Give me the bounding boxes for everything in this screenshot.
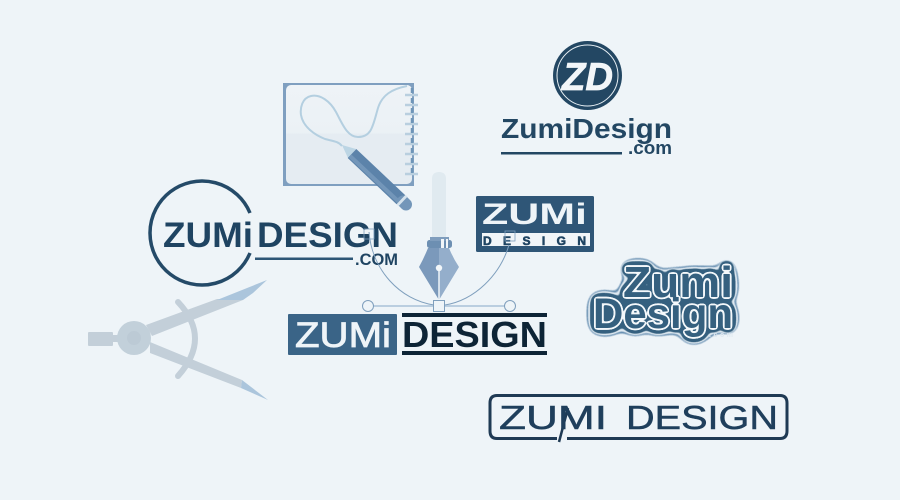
icon: drawing compass <box>88 280 268 400</box>
logo: ZUMI DESIGN outlined plate: ZUMI <box>499 399 607 436</box>
logo: ZUMI DESIGN two-tone bar: DESIGN <box>402 314 547 355</box>
logo: ZD circle badge with ZumiDesign.com: .com <box>628 138 672 158</box>
logo: ZUMI DESIGN boxed emblem: ZUMi <box>482 198 587 231</box>
nib collar <box>427 240 452 248</box>
drawn curve <box>301 86 407 146</box>
wordmark: ZumiDesign <box>501 113 672 144</box>
notebook spiral <box>405 88 418 178</box>
logo: ZUMI DESIGN in ring: ZUMi <box>163 216 253 255</box>
icon: notebook with pencil <box>283 83 418 206</box>
pen barrel <box>432 172 446 237</box>
logo: Zumi Design sticker: Design <box>593 290 733 338</box>
logo: Zumi Design sticker: .com <box>709 332 733 339</box>
bezier curves <box>369 232 509 305</box>
logo: Zumi Design sticker: Zumi <box>623 258 733 307</box>
logo: ZD circle badge with ZumiDesign.com: ZD <box>561 56 613 99</box>
logo: ZD circle badge with ZumiDesign.com <box>501 41 672 158</box>
logo: ZUMI DESIGN two-tone bar: ZUMi <box>295 316 391 355</box>
logo: Zumi Design sticker <box>593 258 733 339</box>
notebook page <box>283 83 414 186</box>
handles <box>373 305 505 307</box>
logo: ZUMI DESIGN two-tone bar <box>288 313 547 355</box>
logo: ZUMI DESIGN outlined plate <box>490 396 787 442</box>
pen nib <box>419 248 439 300</box>
logo: ZUMI DESIGN boxed emblem <box>476 196 594 252</box>
logo: ZUMI DESIGN in ring: DESIGN <box>257 216 398 255</box>
icon: pen tool with bezier handles <box>362 172 516 312</box>
logo: ZUMI DESIGN in ring <box>150 181 398 285</box>
pencil <box>342 145 356 158</box>
badge <box>553 41 622 110</box>
logo: ZUMI DESIGN outlined plate: DESIGN <box>626 399 778 436</box>
logo: ZUMI DESIGN in ring: .COM <box>355 250 398 269</box>
logo: ZUMI DESIGN boxed emblem: DESIGN <box>483 234 586 248</box>
